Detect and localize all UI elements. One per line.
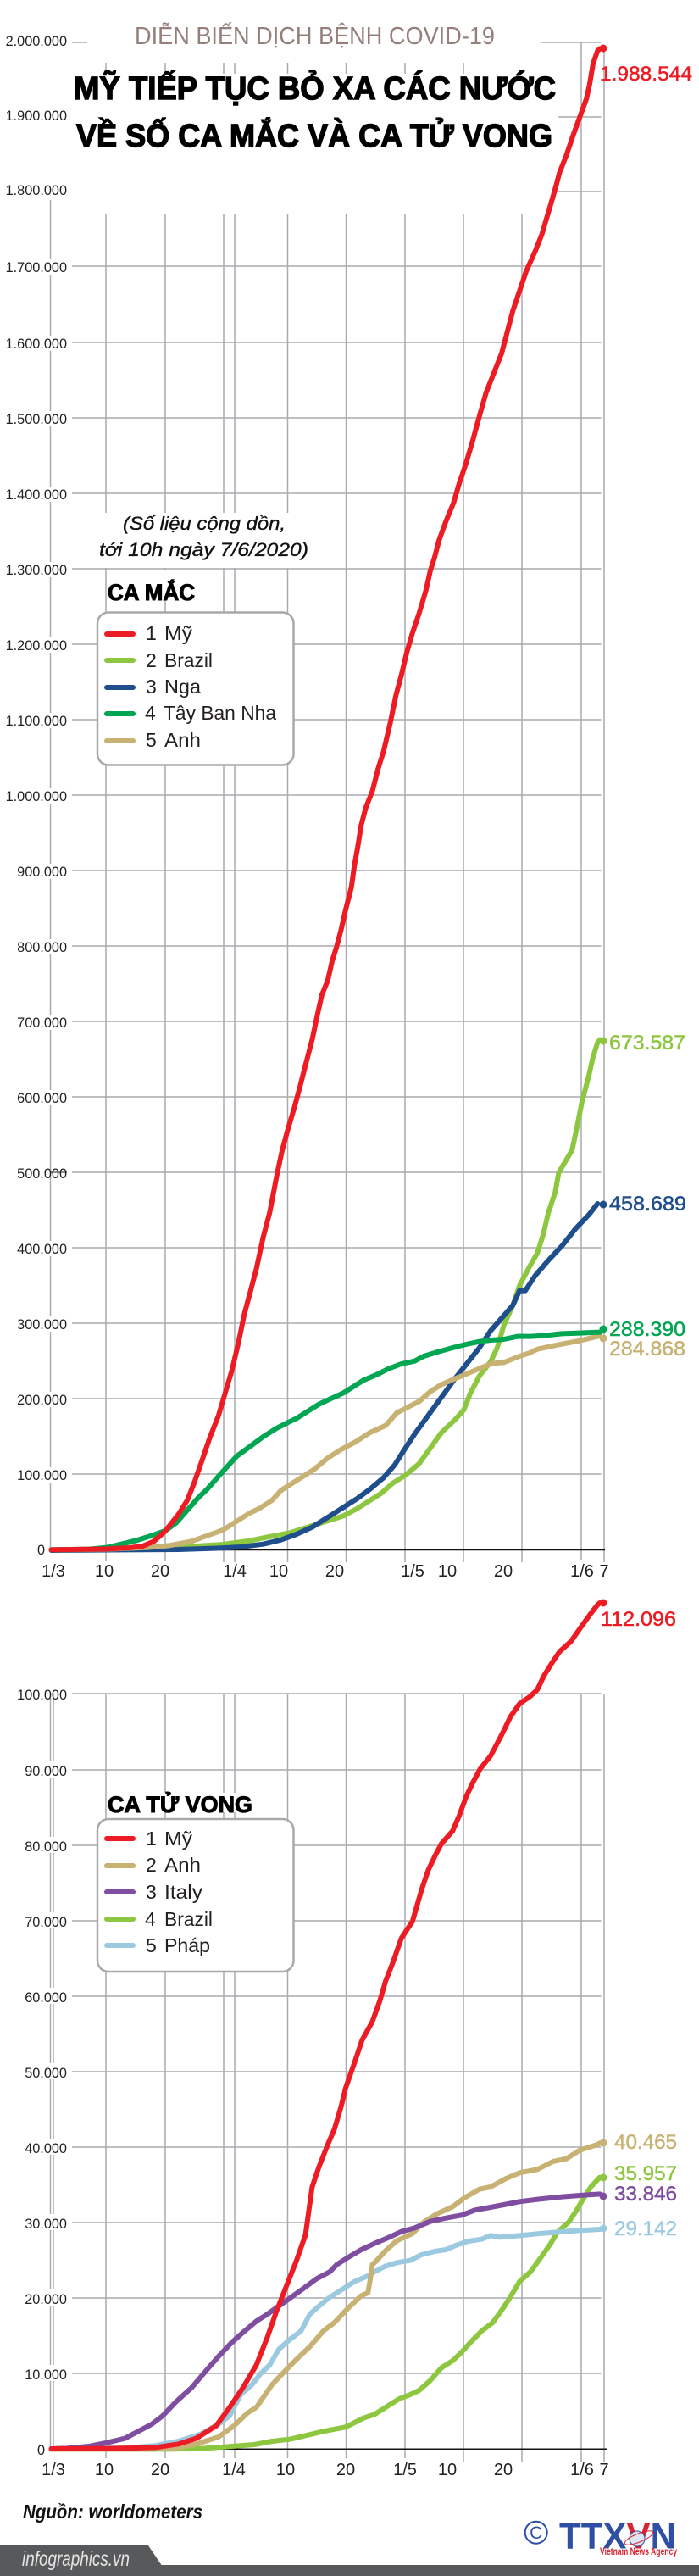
y axis labels: deaths — [17, 1688, 67, 2458]
y axis labels: cases: 300.000 — [17, 1317, 67, 1333]
curve: US deaths — [52, 1603, 600, 2449]
end values: cases: 673.587 — [609, 1032, 685, 1054]
y axis labels: cases: 1.200.000 — [6, 638, 67, 654]
curve: France deaths — [52, 2229, 600, 2449]
x axis labels: deaths: 20 — [336, 2461, 355, 2479]
y axis labels: cases — [6, 34, 67, 1558]
y axis labels: deaths: 20.000 — [25, 2292, 67, 2307]
legend: deaths — [97, 1819, 293, 1972]
y axis labels: deaths: 90.000 — [25, 1764, 67, 1779]
legend: deaths: 2 — [146, 1854, 157, 1876]
legend: deaths: 1 — [146, 1828, 157, 1850]
y axis labels: deaths: 100.000 — [17, 1688, 67, 1703]
x axis labels: deaths — [42, 2461, 609, 2479]
legend: cases: Brazil — [164, 649, 213, 671]
y axis labels: cases: 600.000 — [17, 1091, 67, 1106]
y axis labels: cases: 1.100.000 — [6, 714, 67, 729]
chart: cumulative deaths — [17, 1599, 677, 2479]
legend: cases: 5 — [146, 729, 157, 751]
curves: deaths — [52, 1603, 600, 2449]
x axis labels: deaths: 1/6 — [570, 2461, 594, 2479]
x axis labels: cases: 1/3 — [42, 1562, 65, 1581]
legend: cases: 2 — [146, 649, 157, 671]
y axis labels: cases: 1.800.000 — [6, 183, 67, 198]
title: VỀ SỐ CA MẮC VÀ CA TỬ VONG — [76, 116, 552, 154]
x axis labels: cases: 10 — [269, 1562, 288, 1581]
curve: US cases — [52, 48, 600, 1549]
legend: deaths: 4 — [145, 1908, 156, 1930]
source: Nguồn: worldometers — [23, 2501, 202, 2523]
y axis labels: deaths: 80.000 — [25, 1839, 67, 1855]
subtitle: DIỄN BIẾN DỊCH BỆNH COVID-19 — [135, 21, 495, 50]
legend: cases: Anh — [164, 729, 201, 751]
legend: deaths: Anh — [164, 1854, 201, 1876]
x axis labels: cases: 1/4 — [223, 1562, 247, 1581]
y axis labels: cases: 500.000 — [17, 1166, 67, 1182]
legend: cases: Nga — [164, 676, 201, 698]
y axis labels: cases: 200.000 — [17, 1393, 67, 1408]
footer bar — [0, 2545, 699, 2576]
chart: cumulative cases — [6, 34, 692, 1581]
end values: deaths: 40.465 — [614, 2131, 677, 2154]
y axis labels: cases: 1.900.000 — [6, 108, 67, 124]
y axis labels: cases: 1.600.000 — [6, 337, 67, 352]
y axis labels: cases: 2.000.000 — [6, 34, 67, 49]
end values: deaths — [600, 1599, 677, 2240]
x axis labels: deaths: 10 — [438, 2461, 457, 2479]
y axis labels: cases: 900.000 — [17, 865, 67, 880]
y axis labels: cases: 1.000.000 — [6, 789, 67, 804]
x axis labels: deaths: 1/3 — [42, 2461, 65, 2479]
end values: deaths: 33.846 — [614, 2183, 677, 2206]
y axis labels: cases: 1.400.000 — [6, 487, 67, 503]
end values: cases: 1.988.544 — [600, 63, 692, 86]
end values: cases — [600, 44, 692, 1360]
x axis labels: deaths: 10 — [276, 2461, 295, 2479]
y axis labels: deaths: 50.000 — [25, 2066, 67, 2081]
legend: cases: 1 — [146, 622, 157, 644]
curve: UK cases — [52, 1336, 600, 1549]
legend: deaths: Italy — [164, 1881, 203, 1903]
y axis labels: deaths: 10.000 — [25, 2367, 67, 2383]
legend: cases: 4 — [145, 702, 156, 724]
curve: Spain cases — [52, 1333, 600, 1549]
x axis labels: cases: 20 — [151, 1562, 169, 1581]
y axis labels: cases: 100.000 — [17, 1468, 67, 1483]
x axis labels: cases: 10 — [438, 1562, 457, 1581]
y axis labels: deaths: 30.000 — [25, 2217, 67, 2232]
y axis labels: cases: 700.000 — [17, 1015, 67, 1031]
y axis labels: cases: 1.700.000 — [6, 260, 67, 275]
logo: TTXVN: TTXVN — [559, 2516, 676, 2557]
curve: Brazil deaths — [52, 2178, 600, 2449]
legend: deaths: Pháp — [164, 1934, 210, 1956]
y axis labels: cases: 800.000 — [17, 940, 67, 955]
y axis labels: deaths: 60.000 — [25, 1990, 67, 2006]
y axis labels: deaths: 70.000 — [25, 1915, 67, 1930]
y axis labels: cases: 1.300.000 — [6, 563, 67, 578]
heading: cases: CA MẮC — [108, 579, 195, 605]
y axis labels: cases: 0 — [37, 1543, 45, 1558]
curve: Russia cases — [52, 1204, 597, 1550]
end values: deaths: 112.096 — [601, 1608, 676, 1631]
note: data cut-off: tới 10h ngày 7/6/2020) — [99, 539, 308, 560]
curve: Italy deaths — [52, 2194, 600, 2449]
legend: deaths: 3 — [146, 1881, 157, 1903]
legend: cases — [97, 612, 293, 765]
logo: TTXVN: C — [530, 2523, 542, 2543]
x axis labels: cases: 7 — [599, 1562, 609, 1581]
y axis labels: cases: 1.500.000 — [6, 412, 67, 427]
legend: cases: Tây Ban Nha — [164, 702, 276, 724]
note: data cut-off — [99, 513, 308, 560]
x axis labels: cases — [38, 1562, 614, 1581]
x axis labels: deaths: 20 — [494, 2461, 513, 2479]
curves: cases — [52, 48, 600, 1550]
legend: cases: Mỹ — [164, 622, 193, 644]
x axis labels: deaths: 1/5 — [393, 2461, 417, 2479]
x axis labels: deaths: 1/4 — [222, 2461, 246, 2479]
title: MỸ TIẾP TỤC BỎ XA CÁC NƯỚC — [74, 70, 556, 107]
curve: Brazil cases — [52, 1040, 600, 1549]
x axis labels: deaths: 10 — [95, 2461, 114, 2479]
title — [74, 70, 556, 154]
end values: cases: 288.390 — [609, 1318, 685, 1341]
y axis labels: deaths: 40.000 — [25, 2141, 67, 2156]
end values: cases: 458.689 — [609, 1193, 686, 1216]
x axis labels: cases: 20 — [494, 1562, 513, 1581]
legend: deaths: Mỹ — [164, 1828, 193, 1850]
x axis labels: cases: 1/6 — [570, 1562, 594, 1581]
y axis labels: deaths: 0 — [37, 2443, 45, 2458]
y axis labels: cases: 400.000 — [17, 1242, 67, 1257]
x axis labels: deaths: 20 — [151, 2461, 169, 2479]
legend: deaths: 5 — [146, 1934, 157, 1956]
end values: cases: 284.868 — [609, 1338, 685, 1360]
x axis labels: deaths: 7 — [599, 2461, 609, 2479]
end values: deaths: 29.142 — [614, 2217, 677, 2240]
heading: deaths: CA TỬ VONG — [108, 1790, 252, 1817]
end values: deaths: 35.957 — [614, 2162, 677, 2185]
legend: cases: 3 — [146, 676, 157, 698]
legend: deaths: Brazil — [164, 1908, 213, 1930]
x axis labels: cases: 20 — [325, 1562, 344, 1581]
note: data cut-off: (Số liệu cộng dồn, — [123, 513, 286, 534]
curve: UK deaths — [52, 2143, 600, 2449]
x axis labels: cases: 10 — [95, 1562, 114, 1581]
x axis labels: cases: 1/5 — [401, 1562, 424, 1581]
footer site name: infographics.vn — [22, 2547, 130, 2571]
